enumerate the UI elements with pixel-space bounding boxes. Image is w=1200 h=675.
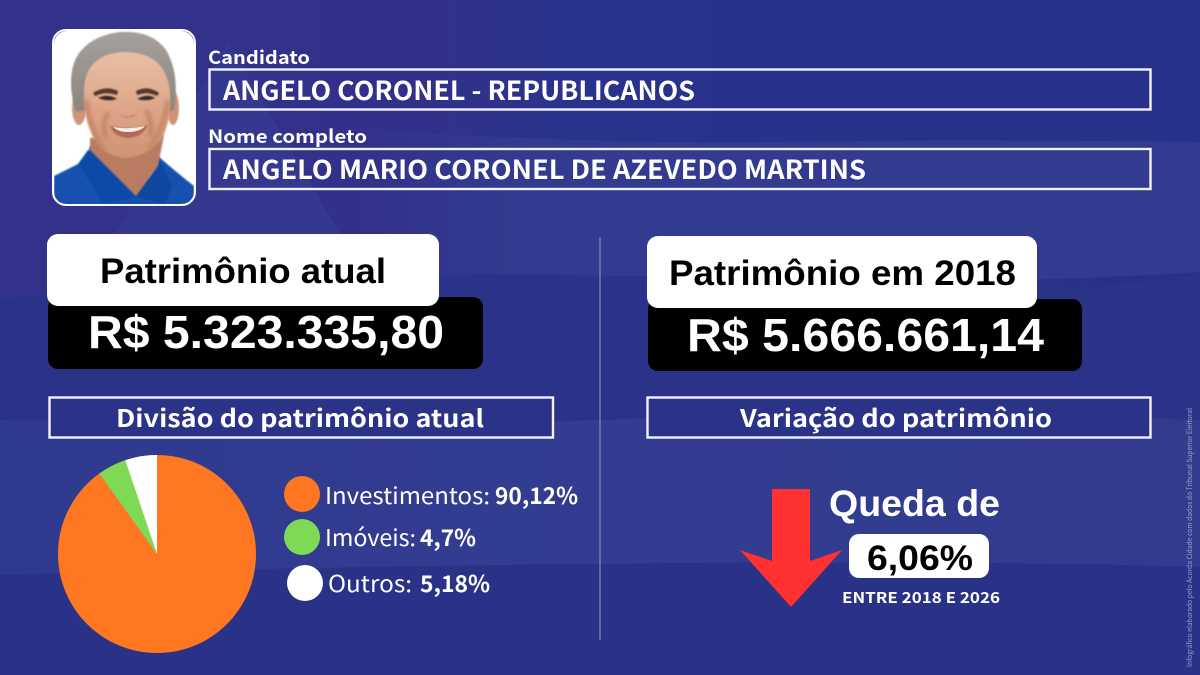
source note: Infográfico elaborado pelo Acorda Cidade com dados do Tribunal Superior Eleitoral xyxy=(1185,408,1195,667)
box: full name: ANGELO MARIO CORONEL DE AZEVEDO MARTINS xyxy=(222,150,866,187)
photo frame xyxy=(53,30,195,205)
callout: decline xyxy=(829,483,1000,608)
candidate photo xyxy=(52,29,196,206)
legend: imoveis: 4,7% xyxy=(420,519,476,553)
legend: outros: 5,18% xyxy=(420,565,490,599)
box: candidate name xyxy=(210,70,1150,110)
arrow: down xyxy=(740,489,842,607)
legend: investimentos: 90,12% xyxy=(495,477,578,511)
pie chart xyxy=(58,455,256,653)
text: period: ENTRE 2018 E 2026 xyxy=(842,587,1000,608)
panel: current wealth xyxy=(47,234,483,369)
legend: imoveis xyxy=(284,519,476,555)
label: nome completo: Nome completo xyxy=(208,123,367,149)
legend xyxy=(284,476,578,601)
panel: 2018 wealth xyxy=(647,236,1082,371)
icon: shirt xyxy=(54,146,194,206)
black value box: R$ 5.666.661,14 xyxy=(687,309,1044,361)
icon: face shading xyxy=(86,100,168,150)
icon: nose xyxy=(120,114,136,118)
box: candidate name: ANGELO CORONEL - REPUBLICANOS xyxy=(222,71,695,108)
legend: imoveis: Imóveis: xyxy=(325,519,416,553)
icon: ears xyxy=(72,91,179,125)
white heading box: Patrimônio em 2018 xyxy=(669,254,1016,293)
white heading box xyxy=(647,236,1037,308)
header: candidate xyxy=(208,44,1150,110)
icon: hair xyxy=(71,32,176,112)
box: full name xyxy=(210,149,1150,189)
heading: division xyxy=(50,398,553,438)
icon: neck xyxy=(90,135,164,196)
icon: eyebrows xyxy=(93,88,159,96)
black value box xyxy=(48,297,483,369)
legend: outros: Outros: xyxy=(328,565,412,599)
white heading box: Patrimônio atual xyxy=(100,252,386,291)
icon: face xyxy=(84,52,170,158)
divider xyxy=(599,237,601,640)
label: candidato: Candidato xyxy=(208,44,310,70)
heading: division: Divisão do patrimônio atual xyxy=(116,399,484,434)
value box: 6,06% xyxy=(867,539,973,578)
header: full name xyxy=(208,123,1150,189)
legend: investimentos: Investimentos: xyxy=(325,477,490,511)
legend: investimentos xyxy=(284,476,578,512)
legend: outros xyxy=(287,565,490,601)
heading: variation: Variação do patrimônio xyxy=(739,399,1052,434)
white heading box xyxy=(47,234,439,306)
icon: smile xyxy=(110,125,148,138)
heading: variation xyxy=(648,398,1150,438)
value box xyxy=(849,534,989,578)
black value box: R$ 5.323.335,80 xyxy=(88,306,444,358)
black value box xyxy=(648,299,1082,371)
text: queda de: Queda de xyxy=(829,483,1000,524)
icon: eyes xyxy=(98,96,155,100)
